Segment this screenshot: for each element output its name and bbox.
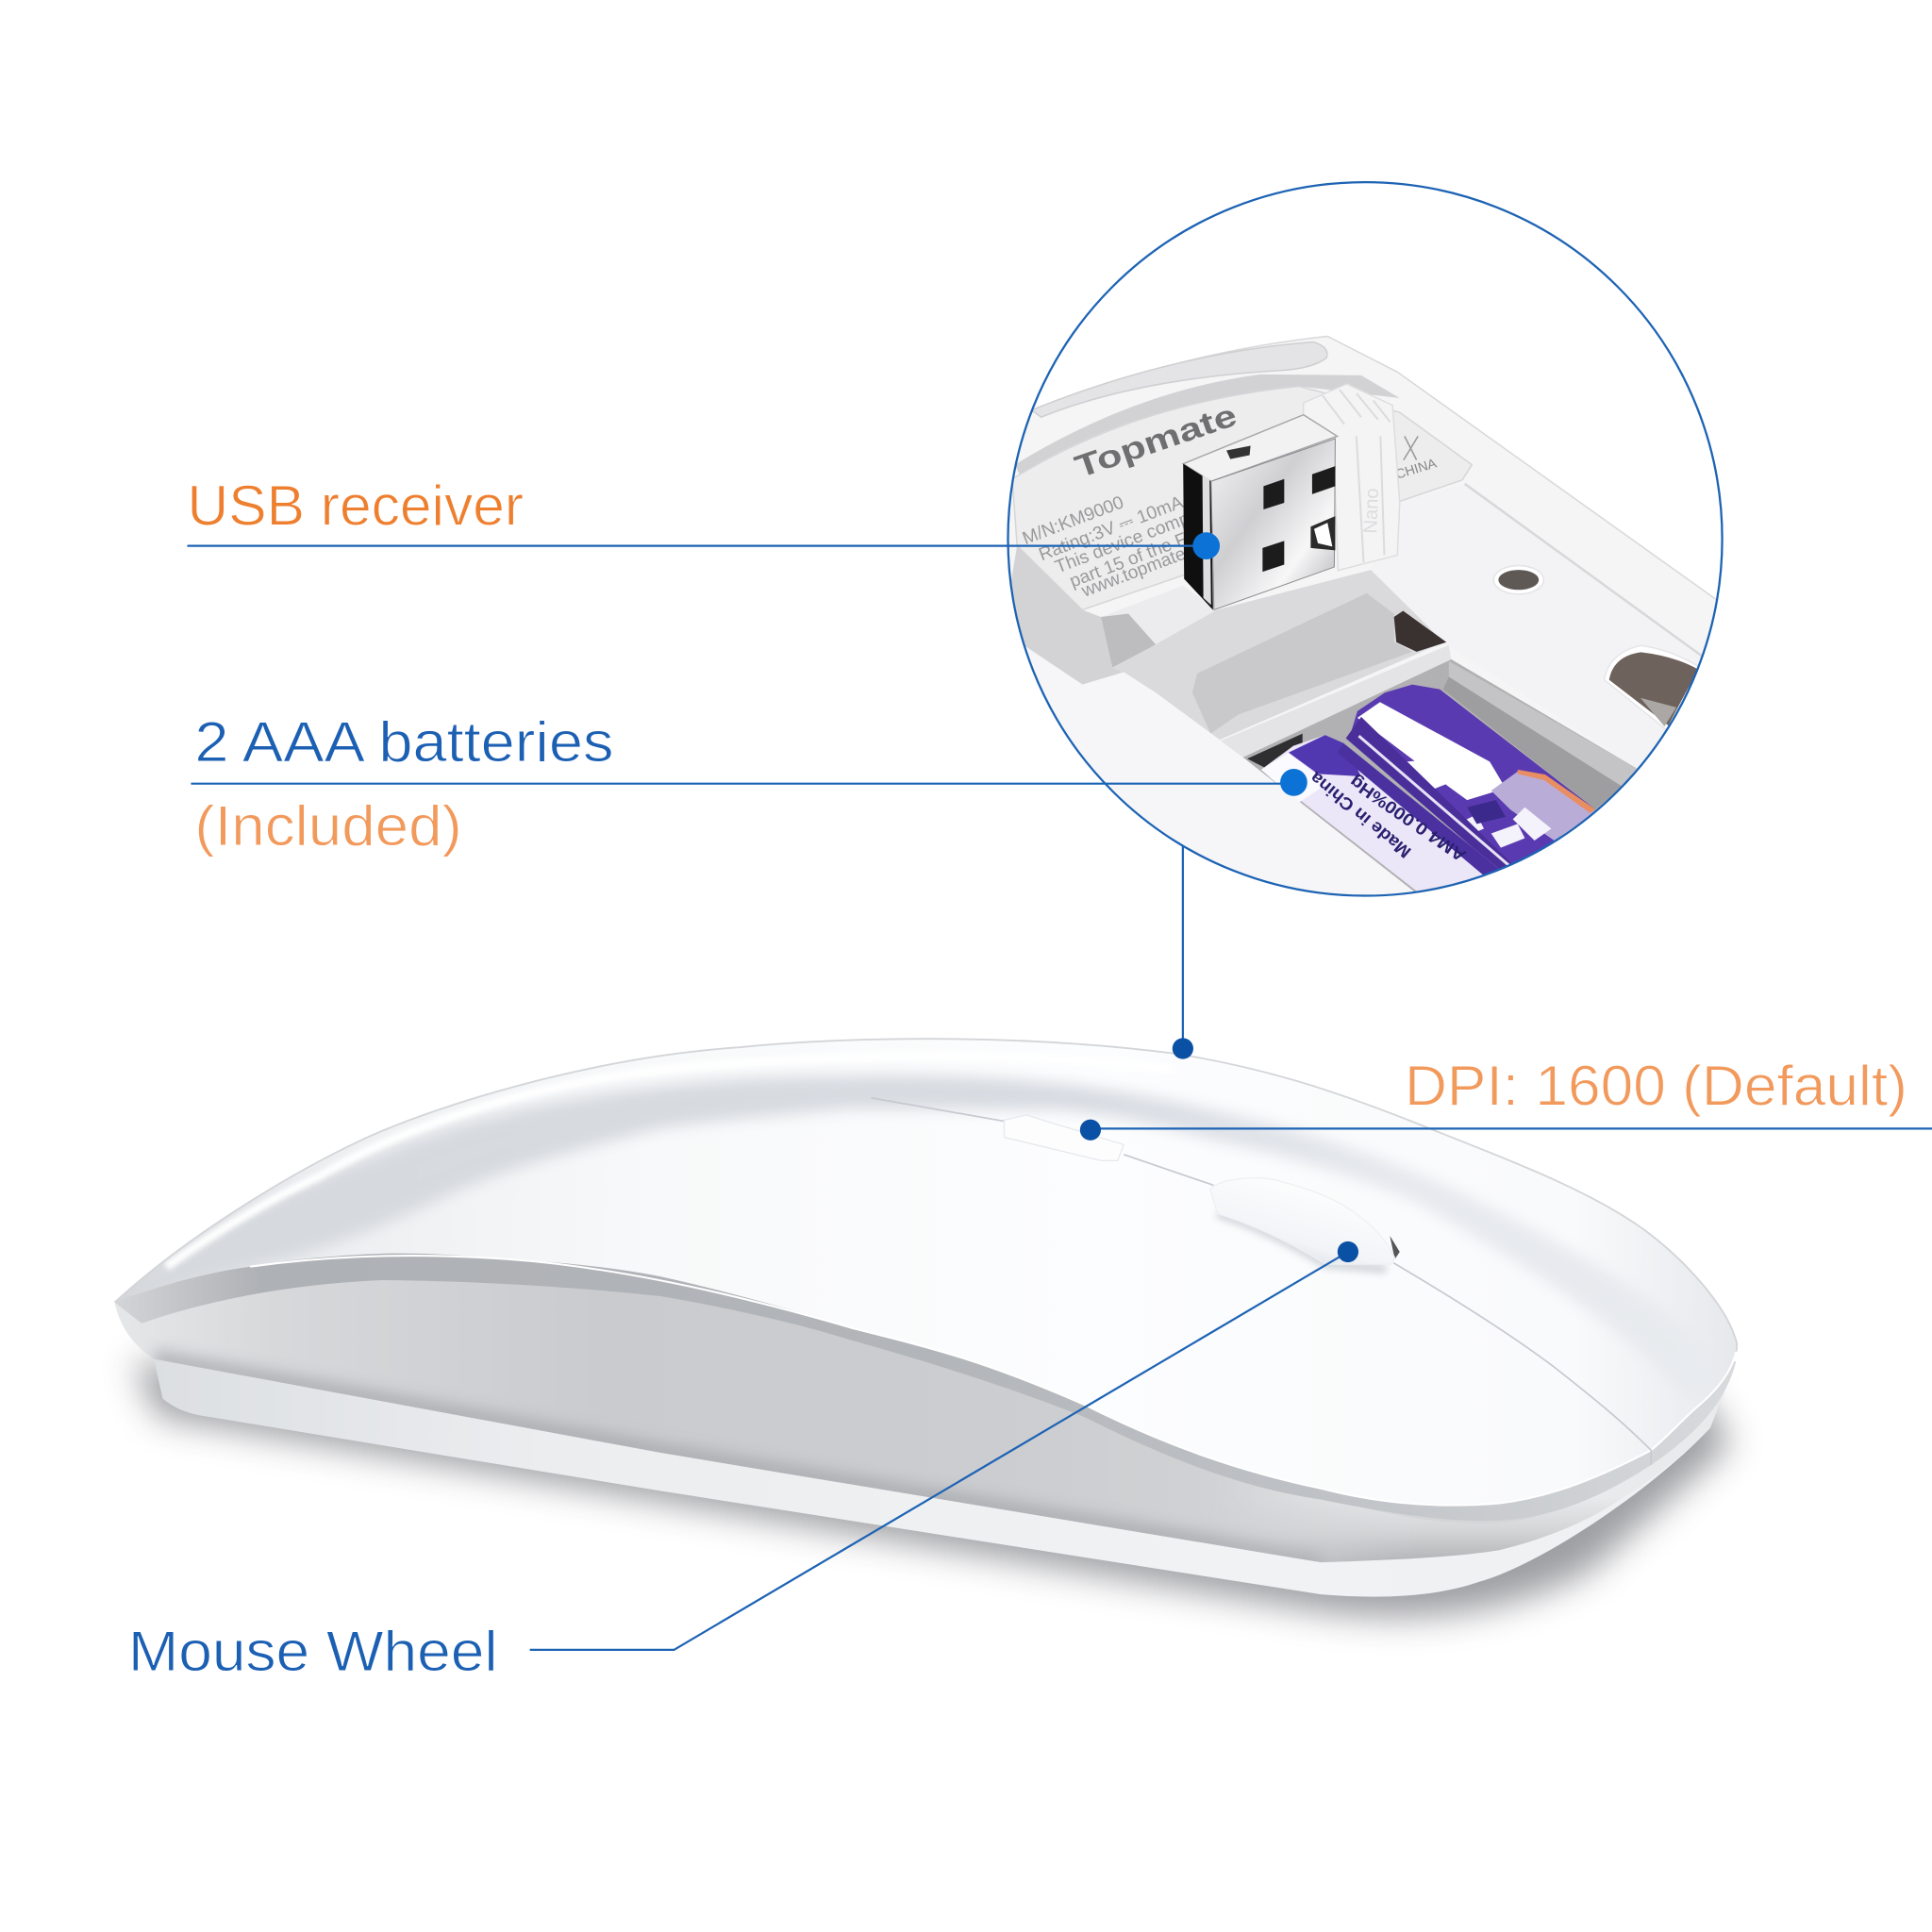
- bay inner wall shade: [1443, 677, 1623, 809]
- foot groove: [1031, 342, 1327, 417]
- front battery: [1261, 735, 1499, 891]
- label fine print: [1020, 456, 1439, 602]
- label fine print: part 15 of the FCC: [1067, 520, 1215, 591]
- slot shadow: [1101, 613, 1160, 667]
- battery divider strip: [1346, 717, 1518, 874]
- mouse base: [154, 1343, 1710, 1597]
- dot: mouse wheel: [1338, 1241, 1358, 1262]
- leader line: mouse wheel: [530, 1252, 1348, 1650]
- label plate: [1012, 386, 1472, 609]
- leader line: batteries: [191, 783, 1293, 785]
- USB receiver: Nano: [1360, 488, 1383, 534]
- label fine print: Rating:3V ⎓ 10mA: [1036, 492, 1186, 565]
- rail edge: [1465, 484, 1704, 658]
- lens background: [991, 170, 1760, 931]
- left grey ledge: [1010, 545, 1124, 685]
- dot: batteries: [1280, 769, 1307, 796]
- rear battery: [1351, 685, 1595, 869]
- illustration: white wireless mouse: [114, 1039, 1737, 1617]
- mouse underside body: [1009, 336, 1716, 764]
- label: 2 AAA batteries: 2 AAA batteries: [194, 710, 613, 774]
- brand text: Topmate: [1071, 398, 1241, 485]
- shell top outline: [114, 1039, 1737, 1352]
- divider wall: [1220, 645, 1451, 758]
- label fine print: This device complies: [1053, 499, 1218, 577]
- mouse side panel: [114, 1232, 1736, 1562]
- seam lines: [871, 1098, 1651, 1465]
- inset circle: underside of mouse: [1007, 181, 1724, 897]
- contour crescent: [1015, 375, 1400, 475]
- DPI button: [1004, 1115, 1124, 1160]
- label: USB receiver: USB receiver: [188, 474, 524, 537]
- mouse top shell: [114, 1039, 1737, 1506]
- mouse cast shadow: [133, 1361, 1731, 1617]
- white edge of the shell: [250, 1256, 1736, 1506]
- leader line: USB receiver: [188, 545, 1207, 547]
- screw hole: [1493, 566, 1543, 594]
- compartment collar: [1112, 570, 1444, 740]
- connector: inset to mouse: [1182, 846, 1184, 1049]
- on/off switch recess: [1605, 645, 1703, 731]
- recycling mark: [1404, 436, 1418, 460]
- USB receiver: [1183, 384, 1400, 609]
- leader line: DPI: [1091, 1127, 1932, 1129]
- label fine print: M/N:KM9000: [1020, 492, 1126, 549]
- grey lip under the top shell: [114, 1232, 1736, 1521]
- label: Included: (Included): [194, 794, 462, 858]
- scroll wheel: [1210, 1178, 1400, 1269]
- shell shading: [164, 1070, 1659, 1349]
- label fine print: CHINA: [1394, 456, 1439, 483]
- label fine print: www.topmate.com: [1078, 530, 1225, 602]
- receiver slot: [1104, 586, 1216, 643]
- lower right body band: [1283, 1392, 1724, 1562]
- bay right wall: [1449, 661, 1637, 787]
- dot: DPI button: [1080, 1120, 1101, 1141]
- dot: USB receiver: [1192, 532, 1220, 559]
- dot: connector: [1173, 1038, 1193, 1059]
- main plate: [1371, 484, 1723, 798]
- dark gap behind batteries: [1247, 734, 1303, 768]
- front cover: [1036, 672, 1414, 894]
- label: DPI: DPI: 1600 (Default): [1405, 1055, 1907, 1118]
- lens outline: [1008, 182, 1723, 896]
- dark clip slot: [1394, 610, 1446, 652]
- label: Mouse Wheel: Mouse Wheel: [128, 1620, 498, 1683]
- shadow along side bottom: [154, 1359, 1321, 1562]
- front battery: Made in China: [1305, 768, 1415, 862]
- upper recess: [1192, 593, 1412, 734]
- front battery: AM4 0.000%Hg: [1345, 772, 1469, 866]
- battery bay: [1242, 659, 1637, 898]
